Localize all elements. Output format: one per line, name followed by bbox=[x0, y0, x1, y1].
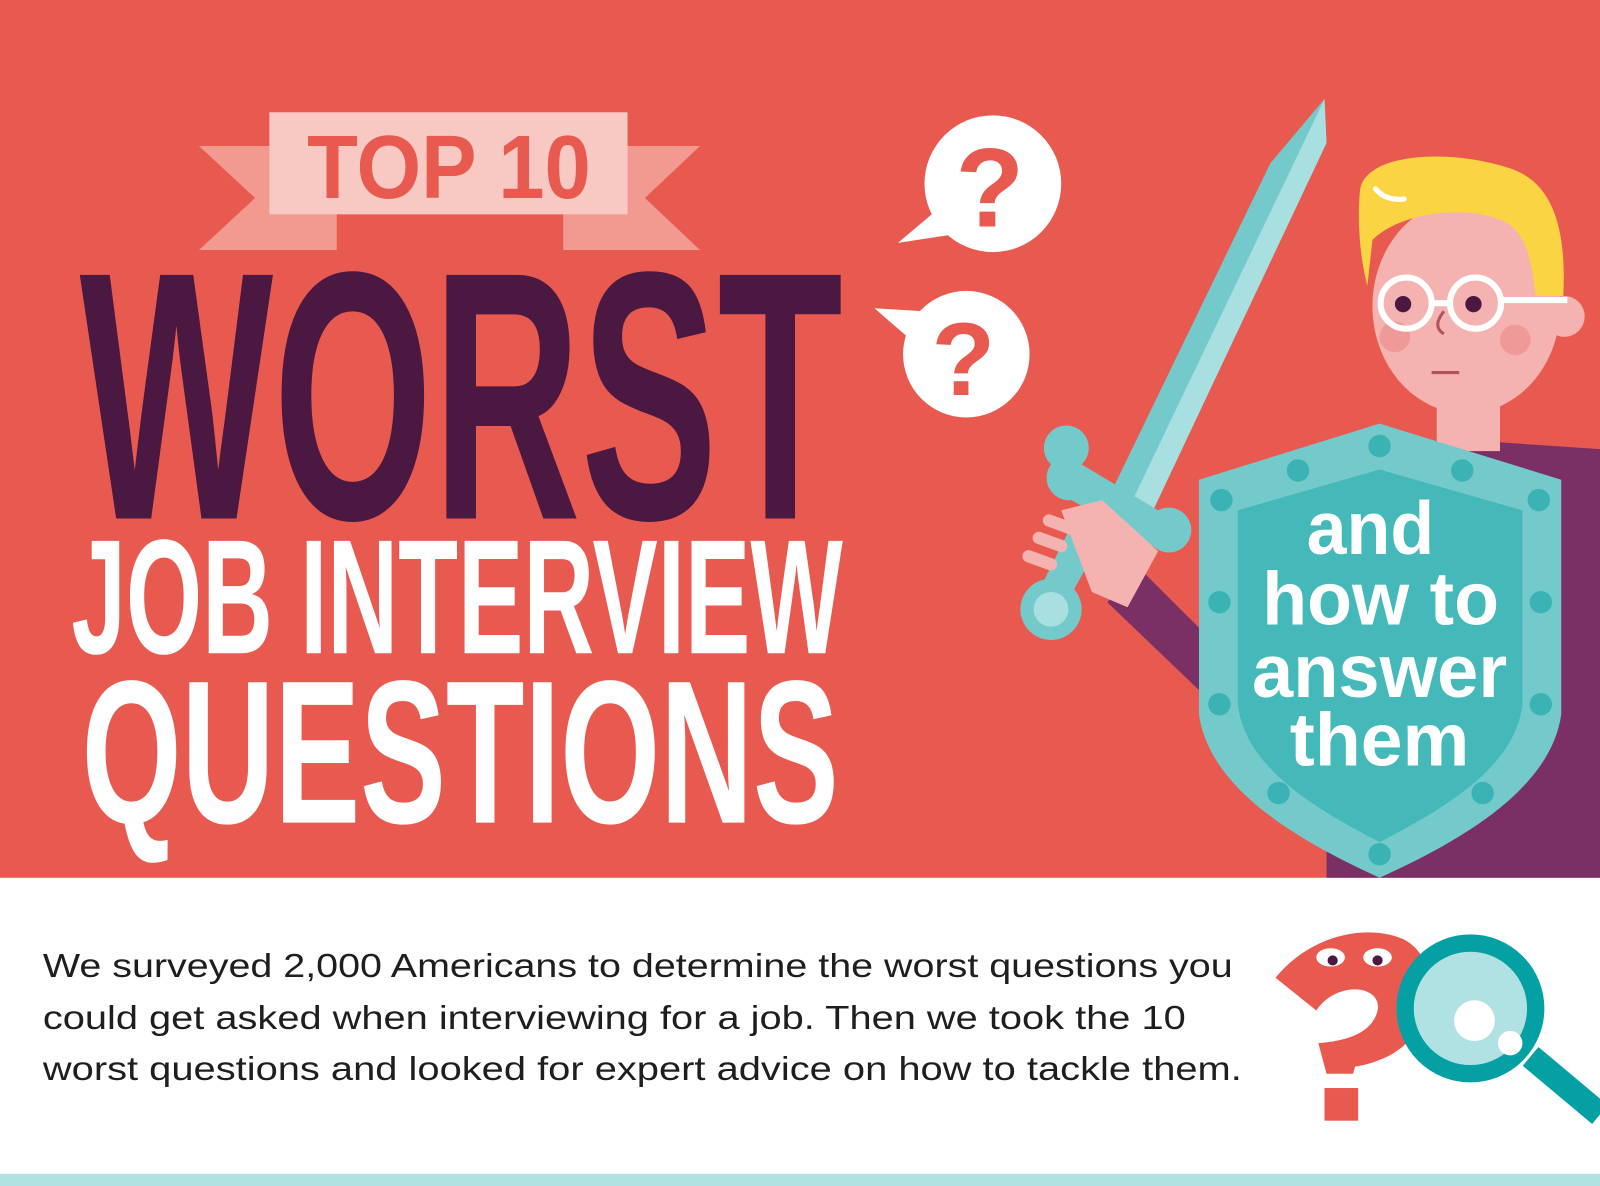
title: JOB INTERVIEW: JOB INTERVIEW bbox=[71, 505, 843, 688]
subtitle text: how to bbox=[1262, 558, 1499, 642]
subtitle text bbox=[1252, 487, 1507, 782]
subtitle text: them bbox=[1290, 698, 1469, 782]
intro text block: worst questions and looked for expert advice on how to tackle them. bbox=[42, 1051, 1242, 1088]
illustration: knight character bbox=[1020, 99, 1600, 878]
title: WORST: WORST bbox=[80, 198, 843, 595]
subtitle text: and bbox=[1307, 487, 1434, 571]
header background bbox=[0, 0, 1600, 878]
intro text block: We surveyed 2,000 Americans to determine the worst questions you bbox=[43, 948, 1233, 985]
icon: speech bubble 2: ? bbox=[931, 302, 995, 418]
bottom strip bbox=[0, 1174, 1600, 1186]
icon: speech bubble 1: ? bbox=[956, 125, 1024, 251]
subtitle text: answer bbox=[1252, 630, 1507, 714]
intro text block: could get asked when interviewing for a job. Then we took the 10 bbox=[43, 1000, 1186, 1037]
icon: speech bubble 2 bbox=[874, 291, 1030, 418]
banner: top 10 bbox=[199, 112, 700, 250]
title: QUESTIONS: QUESTIONS bbox=[82, 639, 839, 867]
banner: top 10: TOP 10 bbox=[307, 118, 591, 218]
intro text block bbox=[42, 948, 1242, 1088]
shield with subtitle bbox=[1199, 424, 1561, 878]
icon: speech bubble 1 bbox=[898, 115, 1061, 252]
icon: angry question mark with magnifier bbox=[1276, 932, 1600, 1121]
